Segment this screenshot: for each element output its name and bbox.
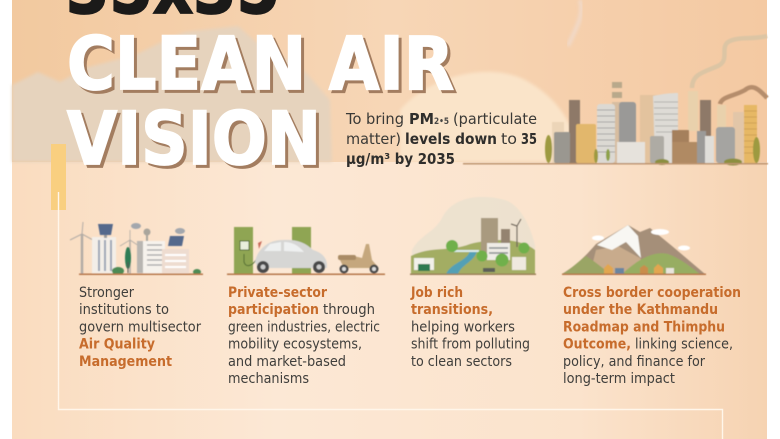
text: private sector participation: participation — [228, 302, 319, 318]
intro text: To bring — [345, 110, 404, 128]
title line: vision: VISION — [67, 97, 321, 182]
icon: city skyline with smokestacks — [463, 36, 768, 166]
text: stronger institutions: govern multisector — [79, 320, 201, 336]
text: private sector participation — [228, 285, 380, 387]
text: job rich transitions: shift from polluting — [411, 336, 530, 352]
text: job rich transitions — [410, 285, 530, 370]
pillar 3: job rich transitions — [410, 197, 536, 370]
icon: EV chargers, car and scooter — [227, 227, 385, 275]
text: cross border cooperation: Roadmap and Thimphu — [563, 320, 725, 336]
text: stronger institutions: Air Quality — [79, 336, 155, 352]
intro text: to — [501, 130, 517, 148]
intro text: 2•5 — [434, 117, 449, 127]
text: cross border cooperation: under the Kathmandu — [563, 302, 718, 318]
text: private sector participation: Private-sector — [228, 285, 328, 301]
intro text — [345, 110, 537, 168]
title line: clean air: CLEAN AIR — [70, 25, 457, 110]
smog clouds behind the title — [12, 26, 332, 162]
frame around the four pillars — [58, 192, 722, 439]
icon: institutions with renewable energy — [70, 222, 203, 275]
faint smoke wisp — [568, 0, 581, 46]
cream hill behind the intro text — [400, 72, 585, 162]
icon: green town with river — [410, 197, 536, 275]
text: cross border cooperation: long-term impact — [563, 371, 675, 387]
title line: clean air: CLEAN AIR — [67, 22, 454, 107]
text: cross border cooperation: Outcome, — [563, 336, 631, 352]
title — [66, 0, 457, 185]
title line: vision: VISION — [70, 100, 324, 185]
text: stronger institutions — [79, 285, 201, 370]
text: cross border cooperation: linking science, — [635, 336, 733, 352]
text: private sector participation: green industries, electric — [228, 320, 380, 336]
text: job rich transitions: helping workers — [411, 320, 515, 336]
text: private sector participation: and market-based — [228, 354, 346, 370]
text: cross border cooperation — [563, 285, 741, 387]
yellow accent bar — [51, 144, 66, 210]
pillar 2: private sector participation — [227, 227, 385, 387]
text: private sector participation: mechanisms — [228, 371, 309, 387]
text: job rich transitions: to clean sectors — [411, 354, 512, 370]
text: stronger institutions: Stronger — [79, 285, 134, 301]
intro text: µg/m³ by 2035 — [346, 150, 455, 168]
icon: snow-capped mountain with village — [562, 225, 706, 275]
text: stronger institutions: institutions to — [79, 302, 169, 318]
intro text: matter) — [346, 130, 401, 148]
intro text: 35 — [521, 130, 537, 148]
text: cross border cooperation: policy, and finance for — [563, 354, 705, 370]
text: job rich transitions: Job rich — [410, 285, 463, 301]
intro text: PM — [409, 110, 434, 128]
smoke plumes — [692, 36, 767, 104]
text: job rich transitions: transitions, — [411, 302, 493, 318]
pillar 1: stronger institutions — [70, 222, 203, 370]
pillar 4: cross border cooperation — [562, 225, 741, 387]
text: private sector participation: mobility ecosystems, — [228, 336, 362, 352]
text: private sector participation: through — [323, 302, 375, 318]
intro text: levels down — [405, 130, 497, 148]
text: cross border cooperation: Cross border cooperation — [563, 285, 741, 301]
intro text: (particulate — [453, 110, 537, 128]
text: stronger institutions: Management — [79, 354, 172, 370]
